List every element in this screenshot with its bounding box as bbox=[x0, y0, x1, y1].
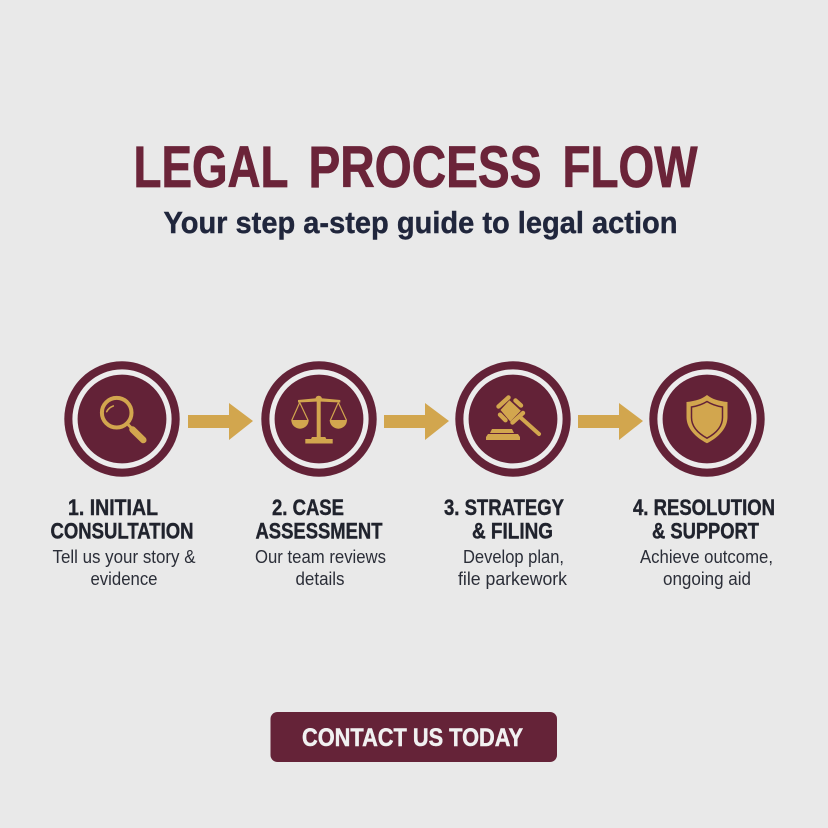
step 4 icon: shield bbox=[649, 361, 765, 477]
step 1 icon: magnifying glass bbox=[64, 361, 180, 477]
step 3 text: & FILING bbox=[472, 518, 553, 544]
contact button bbox=[270, 712, 557, 762]
step 4 text: ongoing aid bbox=[663, 569, 751, 589]
step 1 text: CONSULTATION bbox=[50, 518, 194, 544]
step 4 text: 4. RESOLUTION bbox=[633, 495, 775, 520]
step 3 text bbox=[444, 495, 568, 589]
title: PROCESS bbox=[308, 135, 542, 200]
step 2 text: details bbox=[296, 569, 344, 589]
step 2 text: ASSESSMENT bbox=[256, 518, 383, 544]
step 1 text: 1. INITIAL bbox=[68, 495, 158, 520]
arrow 2 bbox=[384, 403, 449, 440]
title bbox=[134, 135, 698, 200]
step 2 text: 2. CASE bbox=[272, 495, 344, 520]
step 4 text: & SUPPORT bbox=[652, 518, 759, 544]
title: LEGAL bbox=[134, 135, 288, 200]
step 1 text bbox=[50, 495, 196, 589]
step 4 text: Achieve outcome, bbox=[640, 547, 773, 567]
arrow 3 bbox=[578, 403, 643, 440]
title: FLOW bbox=[562, 135, 698, 200]
step 2 text bbox=[255, 495, 386, 589]
step 3 icon: gavel bbox=[455, 361, 571, 477]
step 3 text: 3. STRATEGY bbox=[444, 495, 564, 520]
step 2 text: Our team reviews bbox=[255, 547, 386, 567]
arrow 1 bbox=[188, 403, 253, 440]
step 2 icon: scales of justice bbox=[261, 361, 377, 477]
step 1 text: Tell us your story & bbox=[52, 547, 196, 567]
step 3 text: file parkework bbox=[458, 569, 568, 589]
step 1 text: evidence bbox=[90, 569, 158, 589]
subtitle: Your step a-step guide to legal action bbox=[164, 205, 678, 240]
step 3 text: Develop plan, bbox=[463, 547, 564, 567]
contact button: CONTACT US TODAY bbox=[302, 724, 523, 752]
step 4 text bbox=[633, 495, 775, 589]
